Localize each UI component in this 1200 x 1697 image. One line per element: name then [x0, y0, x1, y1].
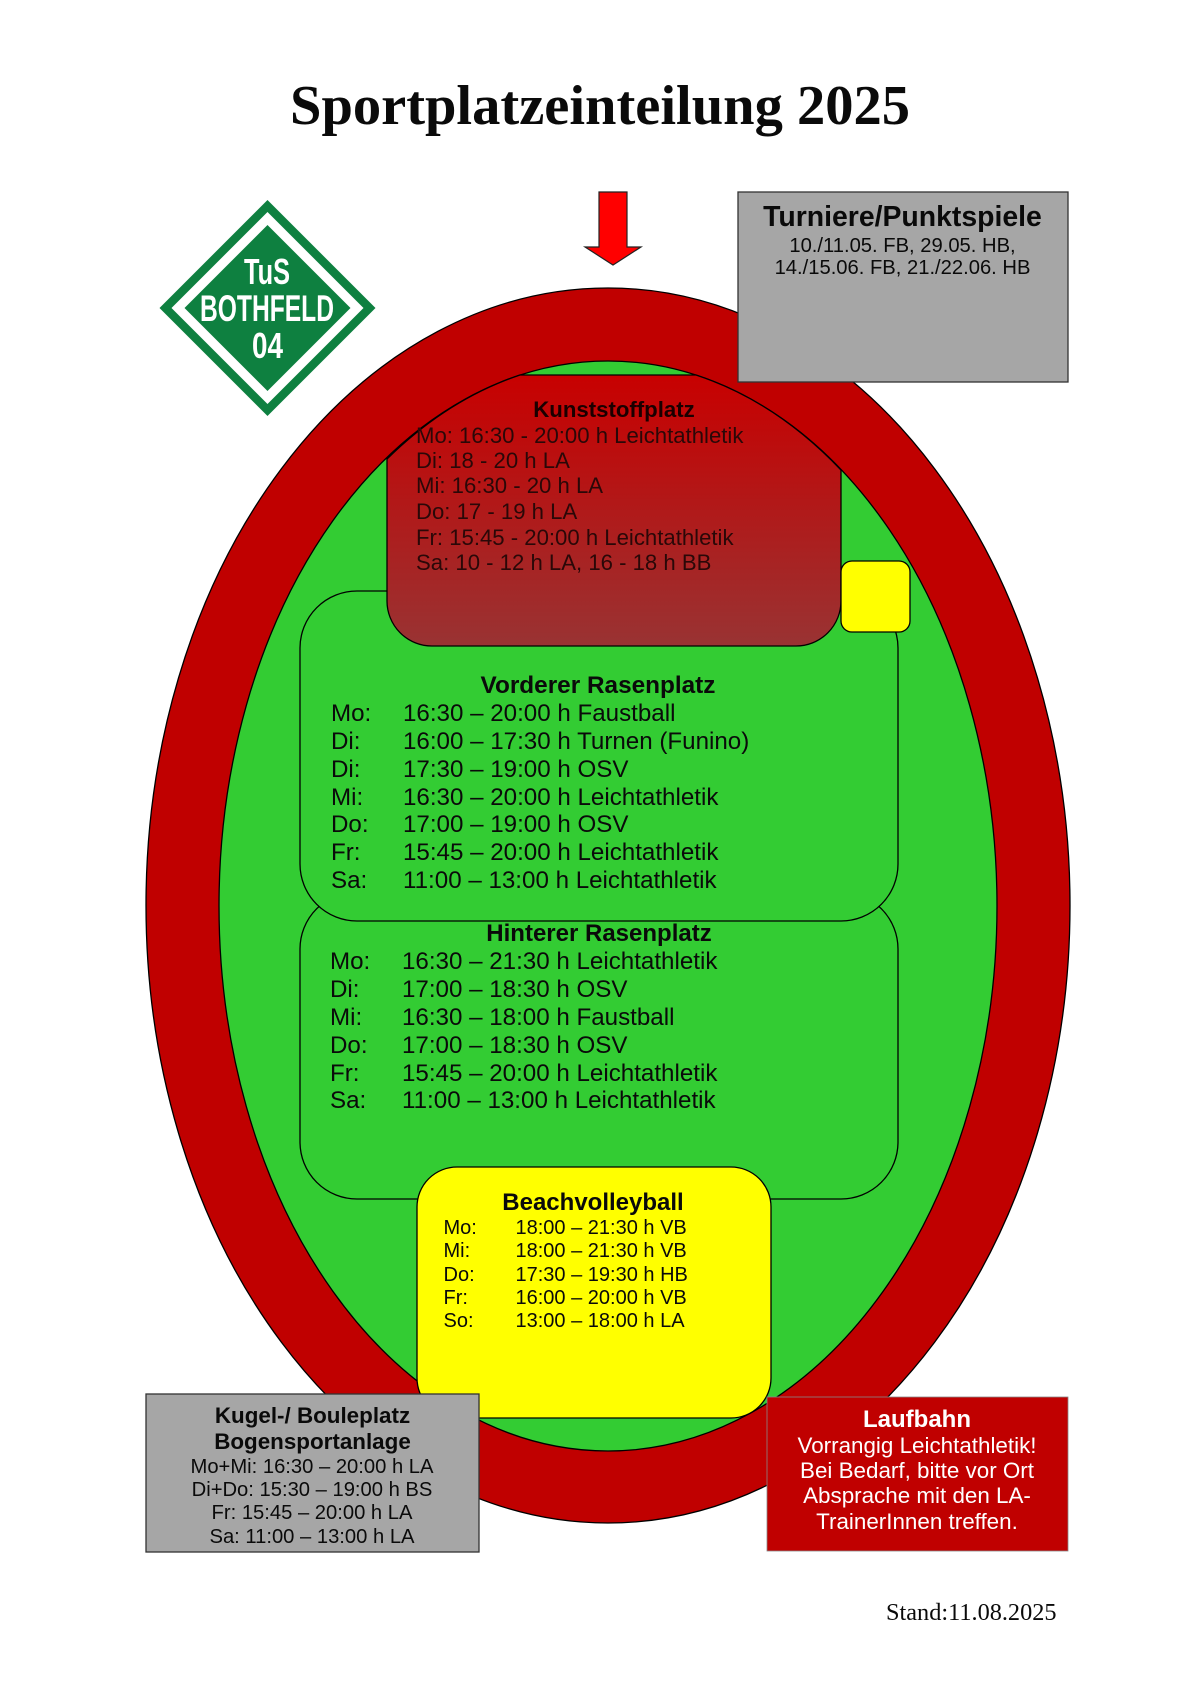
schedule: Vorderer Rasenplatz: Di:: [331, 756, 361, 783]
schedule: Vorderer Rasenplatz: Di:: [331, 728, 361, 755]
schedule: Hinterer Rasenplatz: 11:00 – 13:00 h Leichtathletik: [402, 1087, 717, 1114]
schedule: Hinterer Rasenplatz: Mi:: [330, 1004, 362, 1031]
text: tournament dates: 14./15.06. FB, 21./22.06. HB: [775, 257, 1030, 279]
heading: Kugel-/Bouleplatz Bogensportanlage: Kugel-/ Bouleplatz: [215, 1403, 410, 1428]
text: tournament dates: [775, 235, 1030, 279]
text: tournament dates: 10./11.05. FB, 29.05. HB,: [789, 235, 1016, 257]
heading: Kugel-/Bouleplatz Bogensportanlage: Bogensportanlage: [214, 1429, 411, 1454]
title: Sportplatzeinteilung 2025: [290, 75, 910, 137]
schedule: Hinterer Rasenplatz: Do:: [330, 1032, 368, 1059]
schedule: Beachvolleyball: Mo:: [444, 1217, 477, 1239]
small yellow field: [841, 561, 910, 632]
schedule: Hinterer Rasenplatz: 17:00 – 18:30 h OSV: [402, 976, 627, 1003]
panel: Vorderer Rasenplatz: [300, 591, 898, 921]
heading: Turniere/Punktspiele: Turniere/Punktspiele: [763, 201, 1042, 233]
schedule: Beachvolleyball: Fr:: [444, 1287, 468, 1309]
icon: club logo TuS Bothfeld 04: [160, 200, 376, 416]
text: Laufbahn note: Absprache mit den LA-: [803, 1483, 1031, 1508]
panel: Hinterer Rasenplatz: [300, 892, 898, 1199]
running track outer ellipse: [146, 288, 1070, 1523]
schedule: Vorderer Rasenplatz: 11:00 – 13:00 h Leichtathletik: [403, 867, 718, 894]
schedule: Hinterer Rasenplatz: Fr:: [330, 1060, 360, 1087]
panel: Turniere/Punktspiele: [738, 192, 1068, 382]
schedule: Hinterer Rasenplatz: 15:45 – 20:00 h Leichtathletik: [402, 1060, 718, 1087]
schedule: Hinterer Rasenplatz: Di:: [330, 976, 360, 1003]
schedule: Vorderer Rasenplatz: 16:30 – 20:00 h Leichtathletik: [403, 784, 719, 811]
heading: Kugel-/Bouleplatz Bogensportanlage: [214, 1403, 411, 1454]
schedule: Kugel-/Bouleplatz: [191, 1456, 434, 1548]
schedule: Kunststoffplatz: Mi: 16:30 - 20 h LA: [416, 473, 603, 498]
schedule: Vorderer Rasenplatz: 16:00 – 17:30 h Turnen (Funino): [403, 728, 749, 755]
schedule: Hinterer Rasenplatz: Mo:: [330, 948, 370, 975]
schedule: Kunststoffplatz: Mo: 16:30 - 20:00 h Leichtathletik: [416, 423, 744, 448]
schedule: Vorderer Rasenplatz: Do:: [331, 811, 369, 838]
heading: Hinterer Rasenplatz: Hinterer Rasenplatz: [486, 920, 712, 947]
schedule: Beachvolleyball: 18:00 – 21:30 h VB: [516, 1240, 687, 1262]
footer: date stamp: Stand:11.08.2025: [886, 1599, 1057, 1626]
infield inner ellipse: [219, 361, 997, 1451]
heading: Kunststoffplatz: Kunststoffplatz: [533, 397, 695, 422]
icon: club logo TuS Bothfeld 04: 04: [252, 325, 283, 366]
icon: club logo TuS Bothfeld 04: BOTHFELD: [200, 288, 334, 329]
icon: club logo TuS Bothfeld 04: TuS: [244, 251, 290, 292]
panel: Laufbahn: [767, 1397, 1068, 1551]
text: Laufbahn note: [798, 1433, 1036, 1534]
text: Laufbahn note: TrainerInnen treffen.: [816, 1509, 1018, 1534]
schedule: Vorderer Rasenplatz: 16:30 – 20:00 h Faustball: [403, 700, 675, 727]
schedule: Vorderer Rasenplatz: Fr:: [331, 839, 360, 866]
schedule: Hinterer Rasenplatz: 16:30 – 21:30 h Leichtathletik: [402, 948, 718, 975]
text: Laufbahn note: Bei Bedarf, bitte vor Ort: [800, 1458, 1035, 1483]
schedule: Vorderer Rasenplatz: Mo:: [331, 700, 371, 727]
schedule: Beachvolleyball: Do:: [444, 1264, 475, 1286]
heading: Beachvolleyball: Beachvolleyball: [502, 1189, 684, 1216]
schedule: Kunststoffplatz: Sa: 10 - 12 h LA, 16 - 18 h BB: [416, 550, 711, 575]
schedule: Beachvolleyball: 18:00 – 21:30 h VB: [516, 1217, 687, 1239]
schedule: Vorderer Rasenplatz: Mi:: [331, 784, 363, 811]
schedule: Hinterer Rasenplatz: 17:00 – 18:30 h OSV: [402, 1032, 627, 1059]
schedule: Kunststoffplatz: Di: 18 - 20 h LA: [416, 448, 570, 473]
schedule: Beachvolleyball: [444, 1217, 688, 1332]
schedule: Vorderer Rasenplatz: 15:45 – 20:00 h Leichtathletik: [403, 839, 719, 866]
schedule: Vorderer Rasenplatz: 17:30 – 19:00 h OSV: [403, 756, 628, 783]
schedule: Kugel-/Bouleplatz: Fr: 15:45 – 20:00 h LA: [212, 1502, 413, 1524]
schedule: Beachvolleyball: So:: [444, 1310, 474, 1332]
schedule: Hinterer Rasenplatz: 16:30 – 18:00 h Faustball: [402, 1004, 674, 1031]
schedule: Beachvolleyball: 16:00 – 20:00 h VB: [516, 1287, 687, 1309]
schedule: Kunststoffplatz: Fr: 15:45 - 20:00 h Leichtathletik: [416, 525, 734, 550]
heading: Vorderer Rasenplatz: Vorderer Rasenplatz: [481, 672, 715, 699]
schedule: Beachvolleyball: 13:00 – 18:00 h LA: [516, 1310, 685, 1332]
heading: Laufbahn: Laufbahn: [863, 1406, 971, 1433]
schedule: Kugel-/Bouleplatz: Sa: 11:00 – 13:00 h LA: [209, 1526, 415, 1548]
schedule: Beachvolleyball: Mi:: [444, 1240, 470, 1262]
schedule: Kugel-/Bouleplatz: Mo+Mi: 16:30 – 20:00 h LA: [191, 1456, 434, 1478]
schedule: Kugel-/Bouleplatz: Di+Do: 15:30 – 19:00 h BS: [192, 1479, 432, 1501]
schedule: Beachvolleyball: 17:30 – 19:30 h HB: [516, 1264, 688, 1286]
schedule: Hinterer Rasenplatz: [330, 948, 718, 1114]
panel: Kunststoffplatz: [387, 375, 841, 646]
schedule: Kunststoffplatz: Do: 17 - 19 h LA: [416, 499, 577, 524]
schedule: Vorderer Rasenplatz: 17:00 – 19:00 h OSV: [403, 811, 628, 838]
schedule: Vorderer Rasenplatz: [331, 700, 749, 894]
panel: Beachvolleyball: [417, 1167, 771, 1418]
arrow: entrance: [585, 192, 641, 265]
text: Laufbahn note: Vorrangig Leichtathletik!: [798, 1433, 1036, 1458]
schedule: Hinterer Rasenplatz: Sa:: [330, 1087, 366, 1114]
schedule: Kunststoffplatz: [416, 423, 744, 575]
schedule: Vorderer Rasenplatz: Sa:: [331, 867, 367, 894]
panel: Kugel-/Bouleplatz and Bogensportanlage: [146, 1394, 479, 1552]
